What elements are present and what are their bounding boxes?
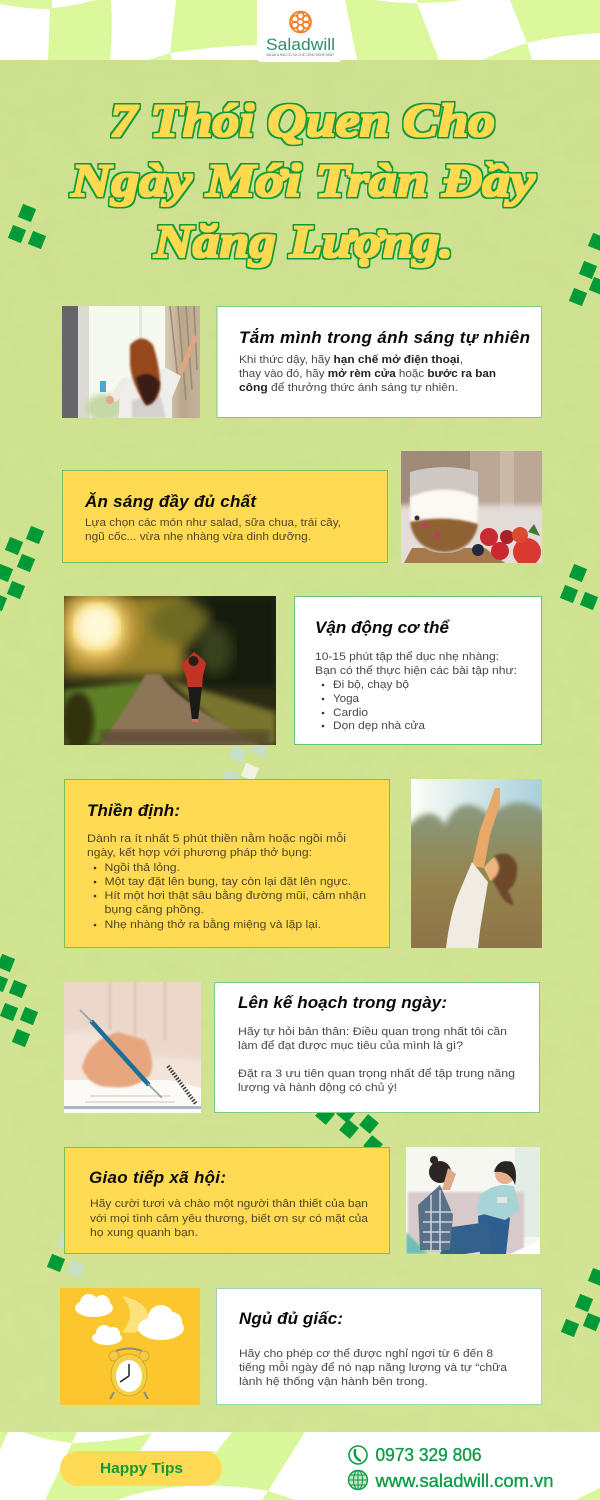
title: Ngày Mới Tràn Đầy xyxy=(70,155,535,207)
body text: ngũ cốc... vừa nhẹ nhàng vừa dinh dưỡng. xyxy=(85,531,311,543)
bullets xyxy=(322,684,324,727)
panel: daily planning xyxy=(60,982,540,1113)
body text: Hãy cho phép cơ thể được nghỉ ngơi từ 6 đến 8 xyxy=(239,1348,493,1360)
body text xyxy=(238,1026,515,1094)
card: exercise text xyxy=(294,596,542,744)
top checkered banner xyxy=(0,0,600,60)
card: sleep text xyxy=(216,1288,542,1404)
body text: làm để đạt được mục tiêu của mình là gì? xyxy=(238,1040,463,1052)
body text: Ngồi thả lỏng. xyxy=(104,862,180,874)
logo tagline: SALAD & RAU CỦ SƠ CHẾ CÔNG NGHỆ NHẬT xyxy=(266,52,334,57)
body text: họ xung quanh bạn. xyxy=(90,1227,198,1239)
body text xyxy=(90,1198,369,1239)
heading: Giao tiếp xã hội: xyxy=(89,1168,226,1187)
body text xyxy=(87,832,366,931)
body text: Hãy cười tươi và chào một người thân thiết của bạn xyxy=(90,1198,368,1210)
panel: meditation xyxy=(64,779,548,955)
panel: exercise xyxy=(47,578,542,752)
panel: social connection xyxy=(64,1147,540,1254)
heading: Thiền định: xyxy=(87,801,180,820)
heading: Ăn sáng đầy đủ chất xyxy=(84,492,257,511)
body text: Hãy tự hỏi bản thân: Điều quan trọng nhất tôi cần xyxy=(238,1026,507,1038)
photo: alarm clock and clouds xyxy=(60,1288,200,1405)
title xyxy=(70,95,535,268)
panel: natural light xyxy=(62,306,542,422)
body text: Dọn dẹp nhà cửa xyxy=(333,720,426,732)
card: social text xyxy=(64,1148,390,1254)
contact: website: www.saladwill.com.vn xyxy=(374,1471,554,1491)
title: 7 Thói Quen Cho xyxy=(110,95,495,147)
card: natural light text xyxy=(217,306,542,418)
body text: lành hệ thống vận hành bên trong. xyxy=(239,1376,428,1388)
body text: Dành ra ít nhất 5 phút thiền nằm hoặc ngồi mỗi xyxy=(87,832,346,845)
body text: Đi bộ, chạy bộ xyxy=(333,679,409,691)
card: breakfast text xyxy=(62,470,388,562)
photo: yogurt and berries xyxy=(401,451,542,563)
body text: Khi thức dậy, hãy hạn chế mở điện thoại , xyxy=(239,354,463,366)
body text: Lựa chọn các món như salad, sữa chua, trái cây, xyxy=(85,517,341,529)
panel: breakfast xyxy=(62,451,552,575)
badge: Happy Tips xyxy=(60,1451,222,1486)
logo: Saladwill xyxy=(257,0,342,62)
body text: lượng và hành động có chủ ý! xyxy=(238,1082,397,1094)
body text: Yoga xyxy=(333,693,360,705)
body text xyxy=(315,651,517,732)
panel: sleep xyxy=(60,1288,542,1405)
photo: woman stretching in sunlight xyxy=(411,779,542,948)
photo: two women talking on sofa xyxy=(406,1147,540,1254)
body text: Hít một hơi thật sâu bằng đường mũi, cảm nhận xyxy=(104,889,366,902)
body text xyxy=(239,354,496,394)
body text: công để thưởng thức ánh sáng tự nhiên. xyxy=(239,382,458,394)
body text: Một tay đặt lên bụng, tay còn lại đặt lên ngực. xyxy=(104,876,351,888)
body text: Bạn có thể thực hiện các bài tập như: xyxy=(315,665,517,677)
card: planning text xyxy=(214,982,540,1112)
body text xyxy=(239,1348,508,1388)
badge: Happy Tips: Happy Tips xyxy=(100,1460,183,1477)
heading: Lên kế hoạch trong ngày: xyxy=(238,993,447,1012)
footer checkered banner xyxy=(0,1432,600,1500)
body text: Nhẹ nhàng thở ra bằng miệng và lặp lại. xyxy=(104,918,321,931)
photo: woman walking on forest road xyxy=(64,596,276,745)
contact: phone: 0973 329 806 xyxy=(376,1445,482,1465)
icon: globe xyxy=(348,1470,368,1490)
card: meditation text xyxy=(64,780,390,948)
photo: hand writing in notebook xyxy=(64,982,201,1113)
body text: ngày, kết hợp với phương pháp thở bụng: xyxy=(87,847,312,859)
logo wordmark: Saladwill xyxy=(266,35,335,54)
icon: orange flower xyxy=(290,12,311,32)
title: Năng Lượng. xyxy=(153,216,453,268)
body text xyxy=(85,517,341,543)
body text: tiếng mỗi ngày để nó nạp năng lượng và tự “chữa xyxy=(239,1361,508,1374)
icon: phone xyxy=(349,1446,367,1464)
decorative green squares xyxy=(0,204,600,1337)
body text: Đặt ra 3 ưu tiên quan trọng nhất để tập trung năng xyxy=(238,1068,515,1080)
heading: Ngủ đủ giấc: xyxy=(239,1309,343,1328)
heading: Vận động cơ thể xyxy=(315,618,451,637)
heading: Tắm mình trong ánh sáng tự nhiên xyxy=(239,328,530,347)
body text: bụng căng phồng. xyxy=(104,904,204,916)
body text: 10-15 phút tập thể dục nhẹ nhàng: xyxy=(315,651,499,663)
photo: woman opening curtains xyxy=(62,306,200,418)
bullets xyxy=(94,867,96,926)
body text: với mọi tình cảm yêu thương, biết ơn sự có mặt của xyxy=(90,1213,369,1225)
body text: Cardio xyxy=(333,707,368,719)
body text: thay vào đó, hãy mở rèm cửa hoặc bước ra ban xyxy=(239,368,496,380)
